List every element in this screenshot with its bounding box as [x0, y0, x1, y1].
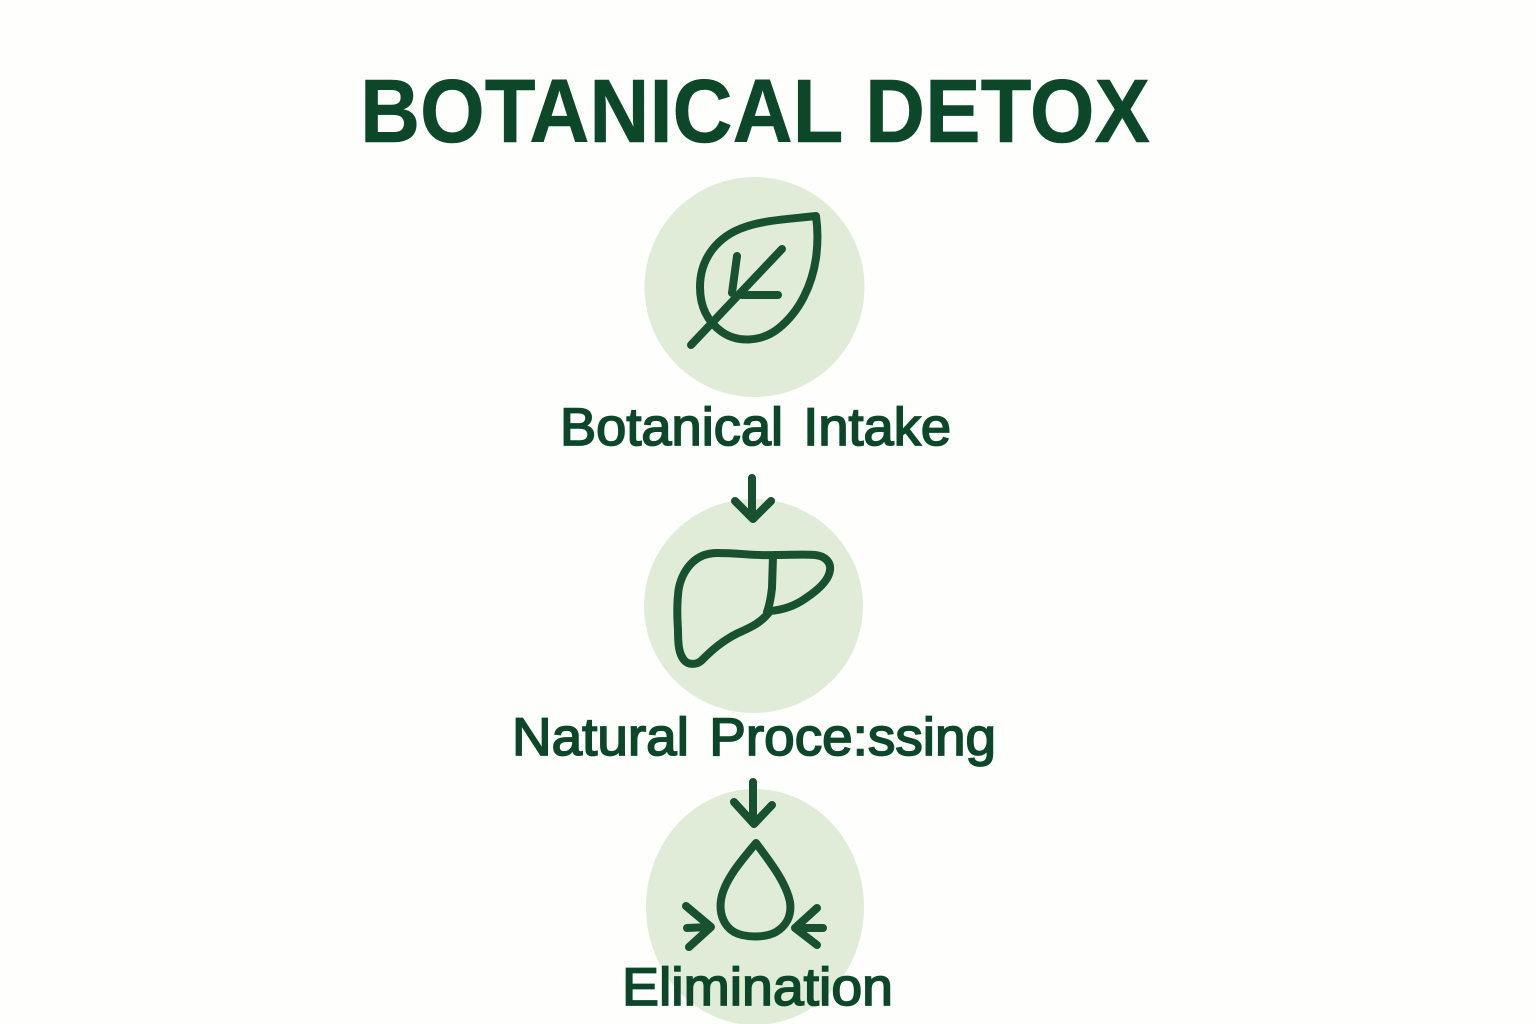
icon: droplet in circle with arrows: [646, 789, 864, 1024]
arrow: intake to processing: [735, 478, 771, 519]
title: BOTANICAL DETOX: [360, 62, 1150, 162]
icon: leaf in circle: [644, 177, 864, 397]
label: elimination: Elimination: [622, 958, 893, 1017]
arrow: processing to elimination: [734, 782, 772, 824]
label: natural processing: Natural Proce:ssing: [512, 708, 996, 767]
label: botanical intake: Botanical Intake: [560, 398, 951, 457]
step 2: natural processing: [512, 499, 996, 767]
step 1: botanical intake: [560, 177, 951, 457]
icon: liver in circle: [644, 499, 863, 713]
step 3: elimination: [622, 789, 893, 1024]
